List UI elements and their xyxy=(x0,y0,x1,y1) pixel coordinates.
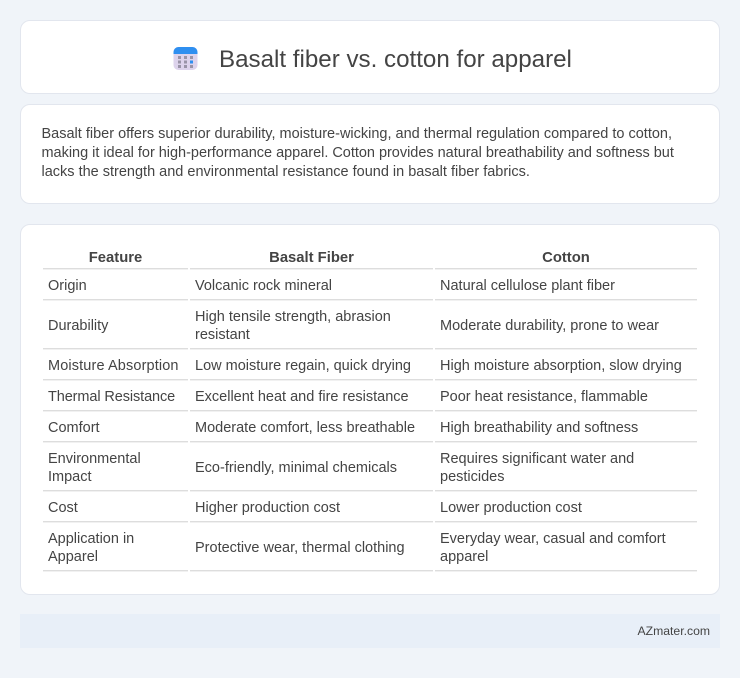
row: thermal resistance xyxy=(48,389,648,405)
panel: comparison table: Durability xyxy=(48,318,108,334)
panel: comparison table: Higher production cost xyxy=(195,500,340,516)
panel: comparison table: apparel xyxy=(440,549,488,565)
panel: comparison table: Moderate durability, prone to wear xyxy=(440,318,659,334)
table header xyxy=(89,250,590,266)
row: environmental impact xyxy=(48,451,634,485)
icon: calendar xyxy=(174,47,198,70)
panel: comparison table: Eco-friendly, minimal chemicals xyxy=(195,460,397,476)
panel: title card xyxy=(20,20,720,94)
footer bar xyxy=(20,614,720,648)
summary text: lacks the strength and environmental resistance found in basalt fiber fabrics. xyxy=(42,164,530,180)
panel: comparison table: Cotton xyxy=(542,250,590,266)
panel: comparison table: Cost xyxy=(48,500,78,516)
panel: comparison table: High moisture absorption, slow drying xyxy=(440,358,682,374)
panel: comparison table: Environmental xyxy=(48,451,141,467)
panel: comparison table: Poor heat resistance, flammable xyxy=(440,389,648,405)
panel: comparison table: Origin xyxy=(48,278,87,294)
title: Basalt fiber vs. cotton for apparel xyxy=(219,46,572,73)
panel: comparison table: Volcanic rock mineral xyxy=(195,278,332,294)
panel: comparison table: Comfort xyxy=(48,420,100,436)
summary text: Basalt fiber offers superior durability, moisture-wicking, and thermal regulation compared to cotton, xyxy=(42,126,672,142)
panel: comparison table: Application in xyxy=(48,531,134,547)
summary text xyxy=(42,126,674,180)
row: cost xyxy=(48,500,582,516)
panel: comparison table: Basalt Fiber xyxy=(269,250,354,266)
panel: comparison table: pesticides xyxy=(440,469,504,485)
panel: comparison table: Lower production cost xyxy=(440,500,582,516)
panel: comparison table: Moderate comfort, less breathable xyxy=(195,420,415,436)
panel: comparison table: Requires significant water and xyxy=(440,451,634,467)
summary text: making it ideal for high-performance apparel. Cotton provides natural breathability and softness but xyxy=(42,145,674,161)
row: moisture absorption xyxy=(48,358,682,374)
panel: comparison table: Excellent heat and fire resistance xyxy=(195,389,409,405)
panel: comparison table: Protective wear, thermal clothing xyxy=(195,540,405,556)
panel: comparison table: Apparel xyxy=(48,549,98,565)
panel: comparison table: High tensile strength, abrasion xyxy=(195,309,391,325)
panel: comparison table: High breathability and softness xyxy=(440,420,638,436)
panel: comparison table: Low moisture regain, quick drying xyxy=(195,358,411,374)
panel: comparison table: Moisture Absorption xyxy=(48,358,179,374)
row: comfort xyxy=(48,420,638,436)
row: application in apparel xyxy=(48,531,666,565)
row: durability xyxy=(48,309,659,343)
panel: comparison table: Thermal Resistance xyxy=(48,389,175,405)
panel: comparison table: Everyday wear, casual and comfort xyxy=(440,531,666,547)
panel: comparison table: Natural cellulose plant fiber xyxy=(440,278,615,294)
panel: comparison table xyxy=(20,224,720,595)
panel: comparison table: Impact xyxy=(48,469,92,485)
panel: comparison table: Feature xyxy=(89,250,142,266)
footer text: AZmater.com xyxy=(638,624,710,638)
panel: summary xyxy=(20,104,720,204)
panel: comparison table: resistant xyxy=(195,327,250,343)
row: origin xyxy=(48,278,615,294)
